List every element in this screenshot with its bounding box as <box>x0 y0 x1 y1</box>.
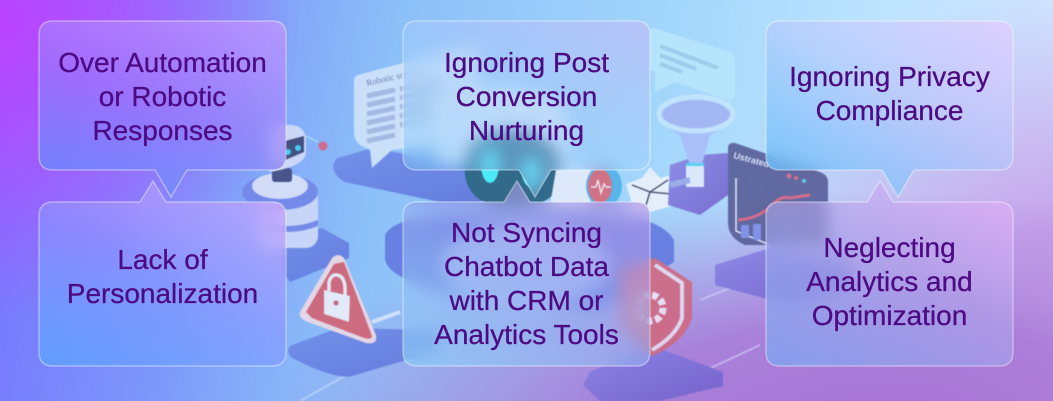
card text: Not Syncing <box>451 217 602 248</box>
card text <box>444 47 609 146</box>
card text <box>58 47 267 146</box>
card: Over Automation or Robotic Responses <box>38 20 287 198</box>
card: Not Syncing Chatbot Data with CRM or Analytics Tools <box>402 180 651 367</box>
card text: Neglecting <box>823 232 956 263</box>
document speech bubble: Robotic script <box>365 67 417 88</box>
card text <box>434 217 619 350</box>
card text: Conversion <box>456 81 597 112</box>
card text: Ignoring Privacy <box>789 61 990 92</box>
card text: Compliance <box>816 95 963 126</box>
card text: Chatbot Data <box>444 251 609 282</box>
card text: Analytics Tools <box>434 319 619 350</box>
card: Lack of Personalization <box>38 180 287 367</box>
card: Ignoring Privacy Compliance <box>765 20 1014 198</box>
pipe connector <box>372 312 400 322</box>
card text: with CRM or <box>449 285 604 316</box>
card text <box>67 244 258 309</box>
broken connector shards <box>626 167 684 212</box>
card text: Over Automation <box>58 47 267 78</box>
platform: left document <box>335 150 480 200</box>
card: Ignoring Post Conversion Nurturing <box>402 20 651 198</box>
warning triangle with lock <box>288 255 440 377</box>
red dot node <box>318 142 328 150</box>
card text: Lack of <box>117 244 208 275</box>
funnel on base <box>658 97 733 215</box>
speech bubble top right <box>650 28 735 100</box>
card text: or Robotic <box>99 81 226 112</box>
central robot <box>385 86 674 310</box>
card text: Optimization <box>812 300 967 331</box>
card text <box>789 61 990 126</box>
card text: Responses <box>92 115 233 146</box>
card text: Nurturing <box>469 115 584 146</box>
card text: Personalization <box>67 278 258 309</box>
document speech bubble <box>354 45 480 168</box>
card: Neglecting Analytics and Optimization <box>765 180 1014 367</box>
shield with gear <box>583 258 723 401</box>
card text: Ignoring Post <box>444 47 609 78</box>
left robot on stacked base <box>242 125 349 282</box>
card text <box>806 232 973 332</box>
card text: Analytics and <box>806 266 973 297</box>
analytics dashboard <box>715 143 850 305</box>
analytics dashboard: Ustrated <box>732 150 770 169</box>
